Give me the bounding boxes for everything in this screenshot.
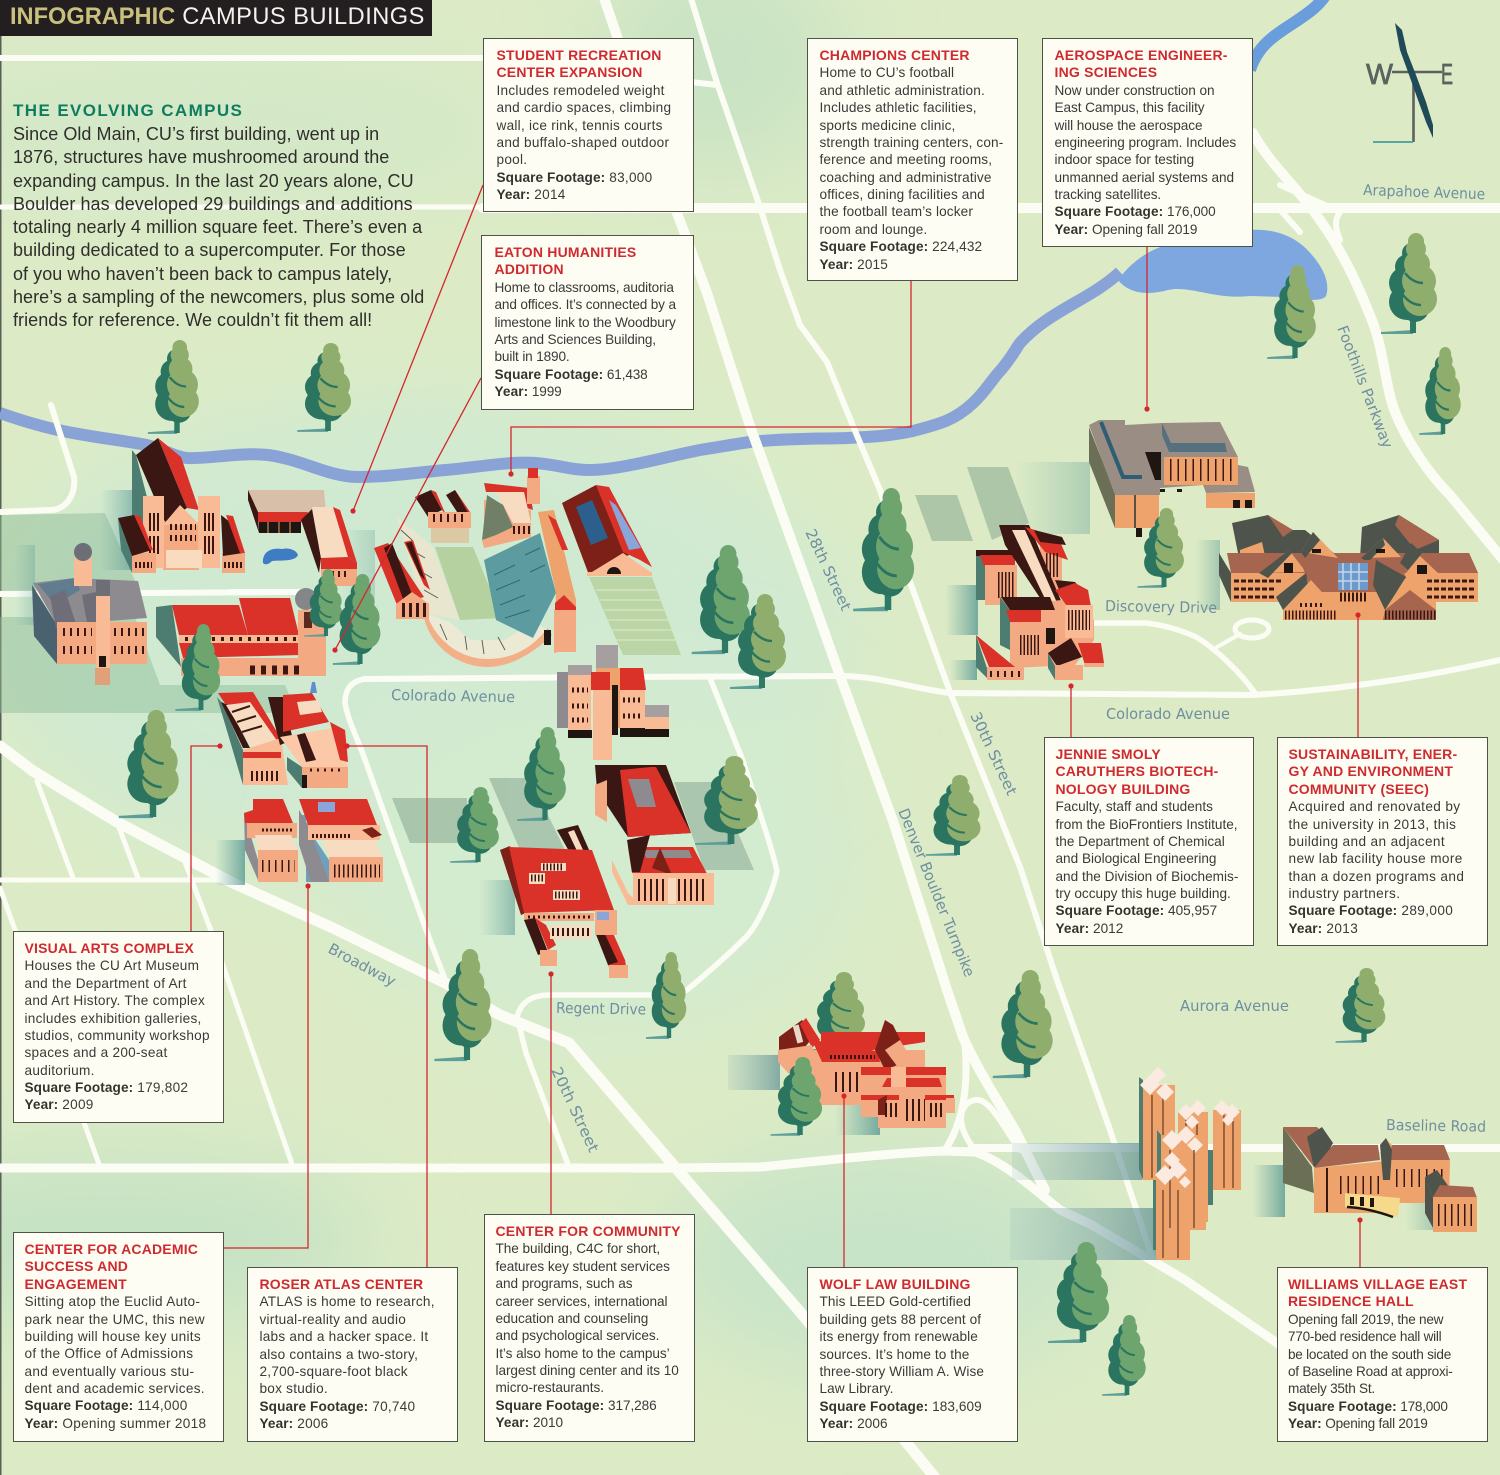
building: Visual Arts xyxy=(217,682,348,788)
panel: Visual Arts Complex: and Art History. The complex xyxy=(24,993,205,1008)
panel: Jennie Smoly Caruthers Biotechnology Building: JENNIE SMOLY xyxy=(1056,746,1161,762)
tree group: mid campus xyxy=(119,488,981,856)
panel: Center for Academic Success and Engagement: Year: Opening summer 2018 xyxy=(24,1416,206,1431)
panel: Center for Community: largest dining center and its 10 xyxy=(496,1363,679,1378)
panel: Champions Center: Home to CU’s football xyxy=(820,65,954,80)
road labels: Discovery Drive xyxy=(1105,597,1217,617)
compass: E xyxy=(1441,59,1453,91)
panel: Roser ATLAS Center: 2,700-square-foot black xyxy=(260,1364,408,1379)
panel: Champions Center: strength training centers, con- xyxy=(820,135,1003,150)
panel: Aerospace Engineering Sciences: Now under construction on xyxy=(1054,83,1214,98)
panel: SEEC: COMMUNITY (SEEC) xyxy=(1288,781,1429,797)
panel: Visual Arts Complex: Square Footage: 179,802 xyxy=(24,1080,188,1095)
road labels: 20th Street xyxy=(547,1064,603,1155)
intro text: building dedicated to a supercomputer. For those xyxy=(13,240,406,260)
tree: behind Wolf Law xyxy=(809,972,865,1051)
panel: Aerospace Engineering Sciences: indoor space for testing xyxy=(1054,152,1194,167)
panel: Roser ATLAS Center: Year: 2006 xyxy=(260,1416,328,1431)
panel: Champions Center: offices, dining facilities and xyxy=(820,187,985,202)
tree group: near hall xyxy=(175,569,380,711)
panel: Eaton Humanities Addition: Arts and Sciences Building, xyxy=(494,332,656,347)
road labels: Colorado Avenue xyxy=(1106,705,1230,723)
panel: Student Recreation Center Expansion: STUDENT RECREATION xyxy=(496,47,662,63)
panel: Center for Academic Success and Engagement: Square Footage: 114,000 xyxy=(24,1398,188,1413)
panel: Champions Center: and athletic administration. xyxy=(820,83,985,98)
building: JSC Biotech xyxy=(976,525,1104,680)
building: Wolf Law xyxy=(778,1018,955,1128)
intro text: friends for reference. We couldn’t fit them all! xyxy=(13,310,372,330)
title bar: INFOGRAPHIC CAMPUS BUILDINGS xyxy=(10,4,425,30)
intro text: of you who haven’t been back to campus lately, xyxy=(13,264,392,284)
panel: Jennie Smoly Caruthers Biotechnology Building: Square Footage: 405,957 xyxy=(1056,903,1217,918)
panel: Student Recreation Center Expansion: Year: 2014 xyxy=(496,187,566,202)
panel: Center for Academic Success and Engagement: of the Office of Admissions xyxy=(24,1346,193,1361)
panel: Center for Academic Success and Engagement: Sitting atop the Euclid Auto- xyxy=(24,1294,200,1309)
building: Koelbel complex xyxy=(595,765,714,905)
panel: Student Recreation Center Expansion: and cardio spaces, climbing xyxy=(496,100,671,115)
panel: Champions Center: ference and meeting rooms, xyxy=(820,152,992,167)
panel: Roser ATLAS Center xyxy=(247,1267,458,1442)
panel: Williams Village East Residence Hall: Opening fall 2019, the new xyxy=(1288,1312,1443,1327)
panel: Roser ATLAS Center: Square Footage: 70,740 xyxy=(260,1399,415,1414)
panel: Aerospace Engineering Sciences: East Campus, this facility xyxy=(1054,100,1205,115)
panel: Champions Center: sports medicine clinic, xyxy=(820,118,955,132)
pond xyxy=(263,548,298,564)
panel: Roser ATLAS Center: ATLAS is home to research, xyxy=(260,1294,435,1309)
tree group: south xyxy=(434,949,1385,1396)
lake xyxy=(1118,230,1327,300)
tree: aerospace xyxy=(1137,508,1184,588)
building: Williams Village East xyxy=(1283,1127,1477,1232)
panel: Student Recreation Center Expansion: Square Footage: 83,000 xyxy=(496,170,652,185)
panel: Roser ATLAS Center: labs and a hacker space. It xyxy=(260,1329,428,1344)
soft building shadows xyxy=(15,462,1433,1260)
panel: Williams Village East Residence Hall: WILLIAMS VILLAGE EAST xyxy=(1288,1276,1467,1292)
panel: Williams Village East Residence Hall: Square Footage: 178,000 xyxy=(1288,1399,1448,1414)
panel: Jennie Smoly Caruthers Biotechnology Building: CARUTHERS BIOTECH- xyxy=(1056,763,1219,779)
panel: Center for Community: education and counseling xyxy=(496,1311,648,1326)
building: tower complex xyxy=(557,645,669,760)
panel: Student Recreation Center Expansion: Includes remodeled weight xyxy=(496,83,665,98)
building: indoor practice facility xyxy=(562,485,652,576)
panel: Champions Center: the football team’s locker xyxy=(820,204,973,219)
panel: Student Recreation Center Expansion: pool. xyxy=(496,152,527,167)
panel: Visual Arts Complex: auditorium. xyxy=(24,1063,95,1078)
panel: Jennie Smoly Caruthers Biotechnology Building: NOLOGY BUILDING xyxy=(1056,781,1190,797)
panel: Wolf Law Building: Law Library. xyxy=(820,1381,894,1396)
panel: SEEC: industry partners. xyxy=(1288,886,1400,901)
panel: Center for Community: career services, international xyxy=(496,1294,667,1308)
practice field xyxy=(589,577,681,655)
panel: Center for Community: and psychological services. xyxy=(496,1328,659,1343)
panel: Student Recreation Center Expansion xyxy=(483,38,694,212)
panel: Wolf Law Building: This LEED Gold-certified xyxy=(820,1294,971,1309)
panel: Aerospace Engineering Sciences xyxy=(1042,38,1253,247)
building: stadium xyxy=(397,468,576,667)
panel: Center for Community: Year: 2010 xyxy=(496,1415,563,1430)
panel: Visual Arts Complex: includes exhibition galleries, xyxy=(24,1010,202,1026)
building: recreation center xyxy=(248,490,357,586)
panel: Visual Arts Complex xyxy=(13,931,224,1123)
panel: Wolf Law Building: building gets 88 percent of xyxy=(820,1312,981,1327)
intro text: expanding campus. In the last 20 years alone, CU xyxy=(13,171,414,191)
building: Macky auditorium xyxy=(118,438,245,573)
road labels: 28th Street xyxy=(801,526,855,614)
panel: Champions Center: CHAMPIONS CENTER xyxy=(820,47,970,63)
road labels: Arapahoe Avenue xyxy=(1363,181,1485,203)
intro text: totaling nearly 4 million square feet. There’s even a xyxy=(13,217,422,237)
panel: Williams Village East Residence Hall: RESIDENCE HALL xyxy=(1288,1293,1414,1309)
panel: Aerospace Engineering Sciences: will house the aerospace xyxy=(1054,118,1202,132)
tree group: central lawn xyxy=(450,727,758,863)
panel: Center for Academic Success and Engagement: ENGAGEMENT xyxy=(24,1276,127,1292)
panel: Center for Community: The building, C4C for short, xyxy=(496,1241,660,1256)
building: Old Main xyxy=(32,543,147,685)
panel: Williams Village East Residence Hall: Year: Opening fall 2019 xyxy=(1288,1416,1428,1431)
intro text: 1876, structures have mushroomed around the xyxy=(13,147,389,167)
panel: Jennie Smoly Caruthers Biotechnology Building: from the BioFrontiers Institute, xyxy=(1056,816,1238,832)
panel: Visual Arts Complex: spaces and a 200-seat xyxy=(24,1045,168,1060)
building: Dal Ward xyxy=(415,490,471,543)
panel: Visual Arts Complex: VISUAL ARTS COMPLEX xyxy=(24,940,194,956)
panel: Eaton Humanities Addition: limestone link to the Woodbury xyxy=(494,314,676,330)
intro text: Boulder has developed 29 buildings and additions xyxy=(13,194,413,214)
panel: Roser ATLAS Center: also contains a two-story, xyxy=(260,1346,418,1362)
buildings: Williams Village towers xyxy=(1139,1067,1241,1260)
intro text xyxy=(13,101,424,330)
panel: Williams Village East Residence Hall: mately 35th St. xyxy=(1288,1381,1375,1396)
panel: Aerospace Engineering Sciences: ING SCIENCES xyxy=(1054,64,1157,80)
panel: Jennie Smoly Caruthers Biotechnology Building: Year: 2012 xyxy=(1056,921,1123,936)
compass xyxy=(1366,23,1453,143)
panel: Center for Community: features key student services xyxy=(496,1259,670,1274)
panel: Aerospace Engineering Sciences: AEROSPACE ENGINEER- xyxy=(1054,47,1228,63)
panel: Eaton Humanities Addition: EATON HUMANITIES xyxy=(494,244,636,260)
panel: Williams Village East Residence Hall: be located on the south side xyxy=(1288,1346,1451,1362)
panel: Williams Village East Residence Hall xyxy=(1277,1267,1488,1442)
road labels: Colorado Avenue xyxy=(391,686,515,706)
panel: Student Recreation Center Expansion: CENTER EXPANSION xyxy=(496,64,643,80)
panel: Visual Arts Complex: Houses the CU Art Museum xyxy=(24,958,199,973)
panel: Center for Academic Success and Engagement: park near the UMC, this new xyxy=(24,1312,205,1326)
panel: Center for Community: micro-restaurants. xyxy=(496,1380,604,1395)
building: long red hall xyxy=(156,588,326,676)
panel: Aerospace Engineering Sciences: engineering program. Includes xyxy=(1054,135,1236,150)
panel: Wolf Law Building: Square Footage: 183,609 xyxy=(820,1399,982,1414)
panel: Aerospace Engineering Sciences: Square Footage: 176,000 xyxy=(1054,204,1216,219)
panel: Aerospace Engineering Sciences: Year: Opening fall 2019 xyxy=(1054,222,1197,237)
panel: SEEC: GY AND ENVIRONMENT xyxy=(1288,763,1453,779)
panel: SEEC: than a dozen programs and xyxy=(1288,869,1464,884)
upper river xyxy=(1250,0,1325,70)
panel: Wolf Law Building: its energy from renewable xyxy=(820,1329,978,1344)
panel: Wolf Law Building: Year: 2006 xyxy=(820,1416,888,1431)
panel: Williams Village East Residence Hall: of Baseline Road at approxi- xyxy=(1288,1364,1453,1379)
panel: Center for Academic Success and Engagement: building will house key units xyxy=(24,1329,201,1344)
panel: Jennie Smoly Caruthers Biotechnology Building: and the Division of Biochemis- xyxy=(1056,869,1238,884)
panel: Eaton Humanities Addition: Home to classrooms, auditoria xyxy=(494,280,674,295)
road labels: Aurora Avenue xyxy=(1180,997,1289,1015)
road labels: Regent Drive xyxy=(556,999,646,1019)
panel: Center for Academic Success and Engagement xyxy=(13,1232,224,1442)
grass quads xyxy=(0,513,297,713)
panel: Champions Center: Square Footage: 224,432 xyxy=(820,239,982,254)
panel: Champions Center: coaching and administrative xyxy=(820,170,992,185)
panel: Visual Arts Complex: Year: 2009 xyxy=(24,1097,94,1112)
compass: W xyxy=(1366,59,1394,91)
panel: Roser ATLAS Center: box studio. xyxy=(260,1381,328,1396)
intro text: THE EVOLVING CAMPUS xyxy=(13,101,243,120)
panel: SEEC: new lab facility house more xyxy=(1288,851,1463,866)
intro text: Since Old Main, CU’s first building, went up in xyxy=(13,124,379,144)
panel: Champions Center: Includes athletic facilities, xyxy=(820,100,977,115)
panel: Visual Arts Complex: studios, community workshop xyxy=(24,1028,210,1043)
panel: Williams Village East Residence Hall: 770-bed residence hall will xyxy=(1288,1329,1441,1344)
panel: Wolf Law Building: WOLF LAW BUILDING xyxy=(820,1276,971,1292)
panel: Center for Community: Square Footage: 317,286 xyxy=(496,1398,657,1413)
panel: Center for Community: and programs, such as xyxy=(496,1276,633,1291)
panel: Jennie Smoly Caruthers Biotechnology Building: and Biological Engineering xyxy=(1056,851,1216,866)
intro text: here’s a sampling of the newcomers, plus some old xyxy=(13,287,424,307)
panel: Champions Center: Year: 2015 xyxy=(820,256,888,272)
panel: Roser ATLAS Center: ROSER ATLAS CENTER xyxy=(260,1276,423,1292)
road labels xyxy=(325,181,1486,1155)
panel: SEEC: Year: 2013 xyxy=(1288,921,1358,936)
panel: Visual Arts Complex: and the Department of Art xyxy=(24,976,187,991)
panel: Jennie Smoly Caruthers Biotechnology Building: try occupy this huge building. xyxy=(1056,886,1231,901)
panel: Center for Academic Success and Engagement: and eventually various stu- xyxy=(24,1364,194,1379)
panel: Student Recreation Center Expansion: wall, ice rink, tennis courts xyxy=(496,118,663,132)
panel: Eaton Humanities Addition: built in 1890. xyxy=(494,349,570,364)
panel: Eaton Humanities Addition xyxy=(481,235,694,410)
building: west stands xyxy=(374,540,430,619)
road labels: Broadway xyxy=(325,940,399,990)
panel: Center for Community: CENTER FOR COMMUNITY xyxy=(496,1223,681,1239)
panel: Eaton Humanities Addition: Year: 1999 xyxy=(494,384,562,399)
panel: Wolf Law Building xyxy=(807,1267,1018,1442)
road labels: Foothills Parkway xyxy=(1333,323,1397,451)
building: Center for Community xyxy=(500,825,628,978)
panel: Champions Center xyxy=(807,38,1018,281)
panel: SEEC: Square Footage: 289,000 xyxy=(1288,903,1453,918)
courtyard quads xyxy=(392,467,1029,870)
building: CASE xyxy=(244,799,383,882)
tree group: north xyxy=(148,233,1461,435)
road labels: 30th Street xyxy=(966,709,1021,798)
panel: SEEC: building and an adjacent xyxy=(1288,834,1445,849)
panel: SEEC: SUSTAINABILITY, ENER- xyxy=(1288,746,1457,762)
panel: Center for Academic Success and Engagement: SUCCESS AND xyxy=(24,1258,128,1274)
road labels: Baseline Road xyxy=(1386,1116,1486,1136)
building: SEEC xyxy=(1219,515,1478,620)
panel: Jennie Smoly Caruthers Biotechnology Building xyxy=(1044,737,1254,946)
panel: Eaton Humanities Addition: Square Footage: 61,438 xyxy=(494,367,648,382)
tree: in front of Wolf Law xyxy=(771,1057,822,1136)
building: Aerospace Engineering Sciences xyxy=(1089,420,1255,537)
panel: Center for Academic Success and Engagement: CENTER FOR ACADEMIC xyxy=(24,1241,198,1257)
road labels: Denver Boulder Turnpike xyxy=(894,806,978,979)
panel: Center for Community xyxy=(484,1214,695,1442)
title bar xyxy=(0,0,432,36)
panel: SEEC: Acquired and renovated by xyxy=(1288,799,1460,814)
leader lines xyxy=(191,185,1363,1267)
panel: SEEC xyxy=(1277,737,1488,946)
panel: Jennie Smoly Caruthers Biotechnology Building: Faculty, staff and students xyxy=(1056,799,1213,814)
panel: Center for Community: It’s also home to the campus’ xyxy=(496,1346,670,1361)
panel: Center for Academic Success and Engagement: dent and academic services. xyxy=(24,1381,205,1396)
panel: Jennie Smoly Caruthers Biotechnology Building: the Department of Chemical xyxy=(1056,834,1225,849)
panel: Eaton Humanities Addition: ADDITION xyxy=(494,261,564,277)
river xyxy=(0,272,1120,477)
panel: Wolf Law Building: sources. It’s home to the xyxy=(820,1346,969,1362)
panel: Wolf Law Building: three-story William A. Wise xyxy=(820,1364,984,1379)
panel: Champions Center: room and lounge. xyxy=(820,222,927,237)
panel: SEEC: the university in 2013, this xyxy=(1288,816,1456,832)
panel: Aerospace Engineering Sciences: tracking satellites. xyxy=(1054,187,1161,202)
panel: Eaton Humanities Addition: and offices. It’s connected by a xyxy=(494,297,676,312)
panel: Student Recreation Center Expansion: and buffalo-shaped outdoor xyxy=(496,135,669,150)
panel: Roser ATLAS Center: virtual-reality and audio xyxy=(260,1312,406,1327)
panel: Aerospace Engineering Sciences: unmanned aerial systems and xyxy=(1054,170,1234,185)
